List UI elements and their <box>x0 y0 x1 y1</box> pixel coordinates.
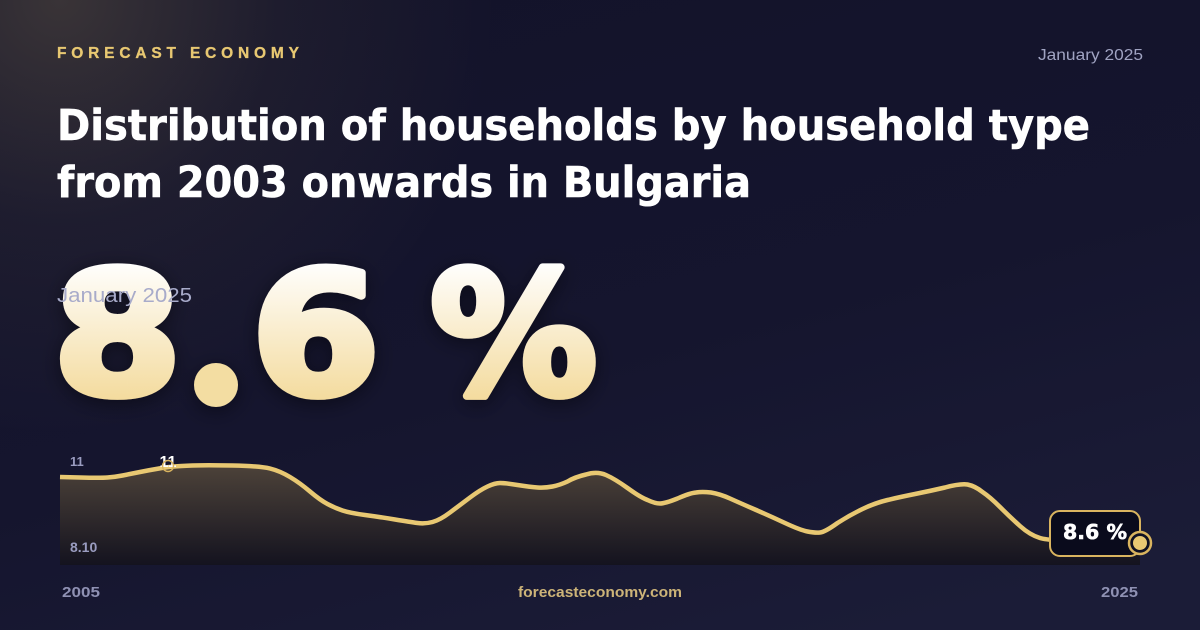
value badge: 8.6 % <box>1063 520 1127 544</box>
chart line <box>60 465 1140 543</box>
y axis max label: 11 <box>70 454 84 469</box>
peak label: 11 <box>160 454 177 471</box>
title: Distribution of households by household type <box>57 101 1090 151</box>
big value <box>53 236 597 434</box>
area chart <box>60 454 1140 565</box>
end year: 2025 <box>1101 585 1138 601</box>
y axis min label: 8.10 <box>70 539 97 555</box>
title <box>57 101 1090 208</box>
end marker <box>1129 532 1151 554</box>
date top right: January 2025 <box>1038 47 1143 64</box>
brand label: FORECAST ECONOMY <box>57 45 300 62</box>
title: from 2003 onwards in Bulgaria <box>57 158 751 208</box>
website: forecasteconomy.com <box>518 585 682 601</box>
big value: 8.6 <box>53 236 380 434</box>
start year: 2005 <box>62 585 100 601</box>
big value: % <box>430 236 597 434</box>
peak marker <box>162 460 174 472</box>
date overlapping big value: January 2025 <box>57 285 192 307</box>
chart area fill <box>60 465 1140 565</box>
value badge <box>1050 511 1140 556</box>
